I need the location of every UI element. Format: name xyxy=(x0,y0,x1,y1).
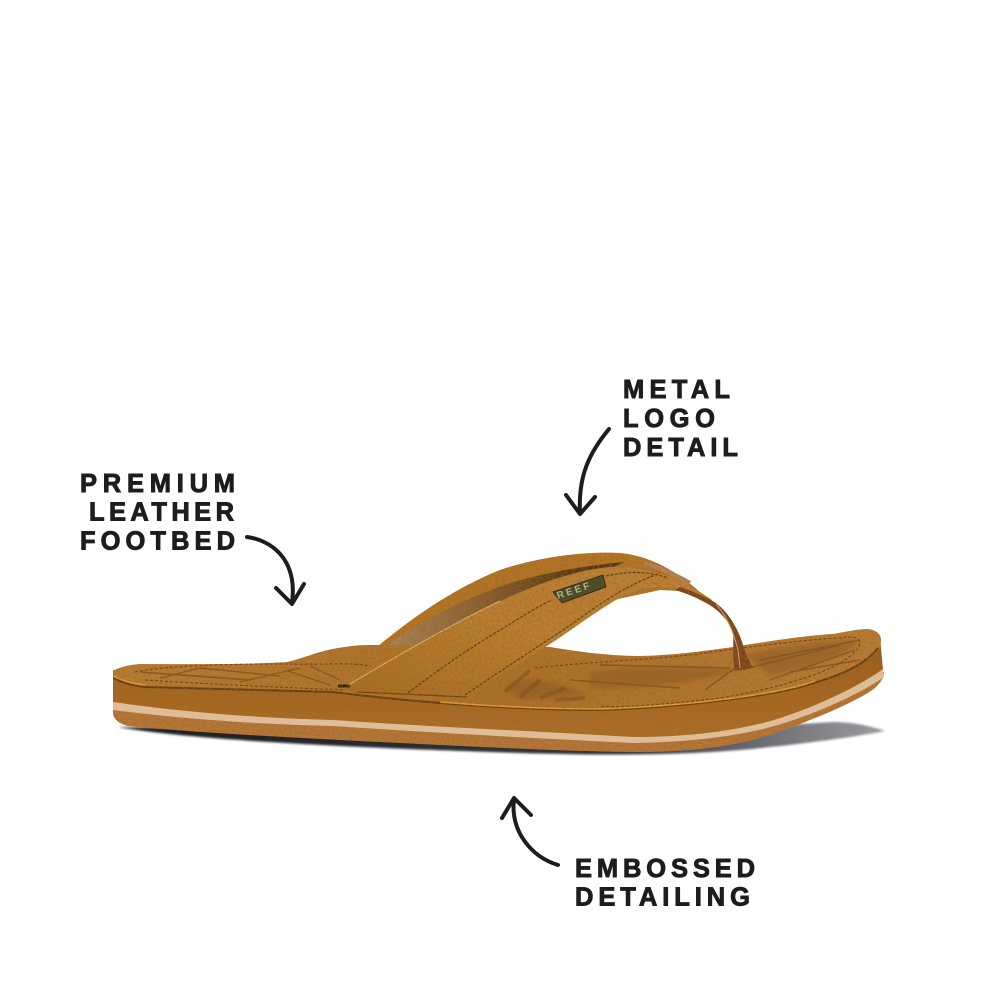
midsole stripe xyxy=(113,669,884,743)
embossed palm detailing xyxy=(140,640,860,700)
footbed edge xyxy=(113,648,878,710)
front strap xyxy=(343,567,712,697)
label text xyxy=(623,376,738,462)
label text xyxy=(575,855,755,912)
callout: metal logo detail xyxy=(566,376,738,514)
strap stitching xyxy=(408,572,668,695)
arrow xyxy=(247,537,304,604)
sandal body xyxy=(113,553,884,752)
arrow xyxy=(566,429,609,514)
ground shadow xyxy=(118,722,885,755)
back strap with fleece lining xyxy=(378,553,700,660)
metal logo plate: REEF xyxy=(556,580,593,602)
label text: METAL xyxy=(623,376,730,404)
strap edge shade xyxy=(345,601,500,687)
label text: PREMIUM xyxy=(80,470,235,498)
outsole bottom layer xyxy=(113,672,884,752)
sandal photo illustration xyxy=(113,553,885,755)
callout: premium leather footbed xyxy=(80,470,304,604)
midsole xyxy=(113,637,883,738)
label text xyxy=(80,470,235,556)
label text: LEATHER xyxy=(89,498,234,526)
label text: LOGO xyxy=(623,405,715,433)
footbed xyxy=(113,629,881,710)
footbed stitching xyxy=(135,637,860,707)
embossed shading xyxy=(505,640,858,700)
callout: embossed detailing xyxy=(502,798,755,912)
label text: FOOTBED xyxy=(80,528,235,556)
arrow xyxy=(502,798,558,865)
label text: DETAILING xyxy=(575,884,750,912)
label text: EMBOSSED xyxy=(575,855,755,883)
metal logo plate xyxy=(553,575,606,603)
label text: DETAIL xyxy=(623,434,738,462)
toe thong xyxy=(644,563,753,671)
